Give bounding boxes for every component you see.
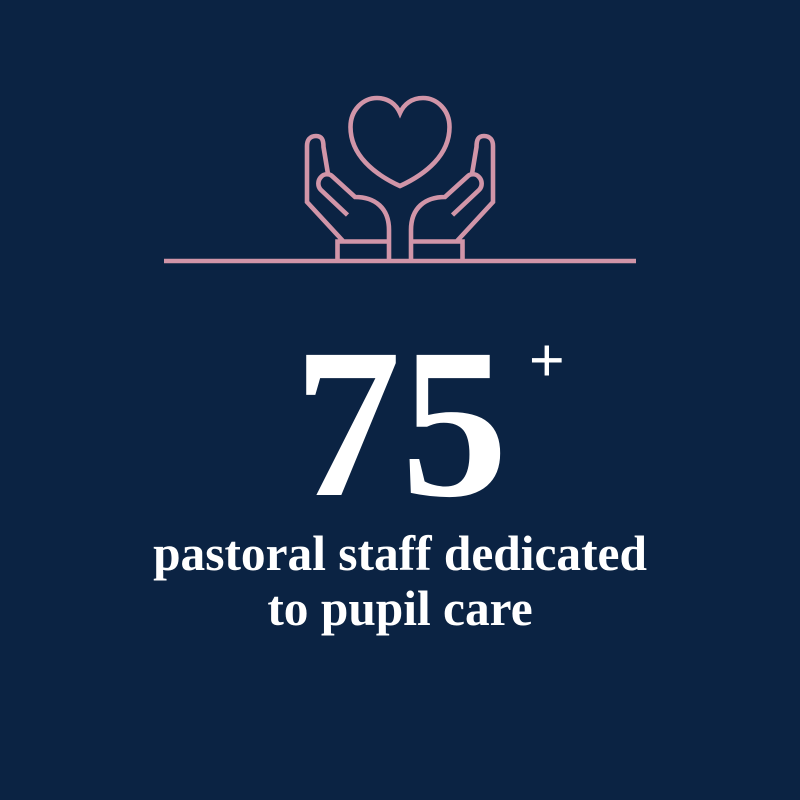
caption bbox=[153, 526, 647, 636]
big number 75: 75 bbox=[294, 305, 508, 542]
caption line 1: pastoral staff dedicated bbox=[153, 526, 647, 581]
icon: left hand bbox=[307, 136, 389, 260]
icon: right hand bbox=[411, 136, 493, 260]
caption line 2: to pupil care bbox=[267, 581, 533, 636]
baseline rule bbox=[164, 259, 636, 263]
icon: hands holding heart bbox=[164, 98, 636, 261]
icon: heart bbox=[350, 98, 450, 186]
plus sign: + bbox=[529, 326, 565, 394]
